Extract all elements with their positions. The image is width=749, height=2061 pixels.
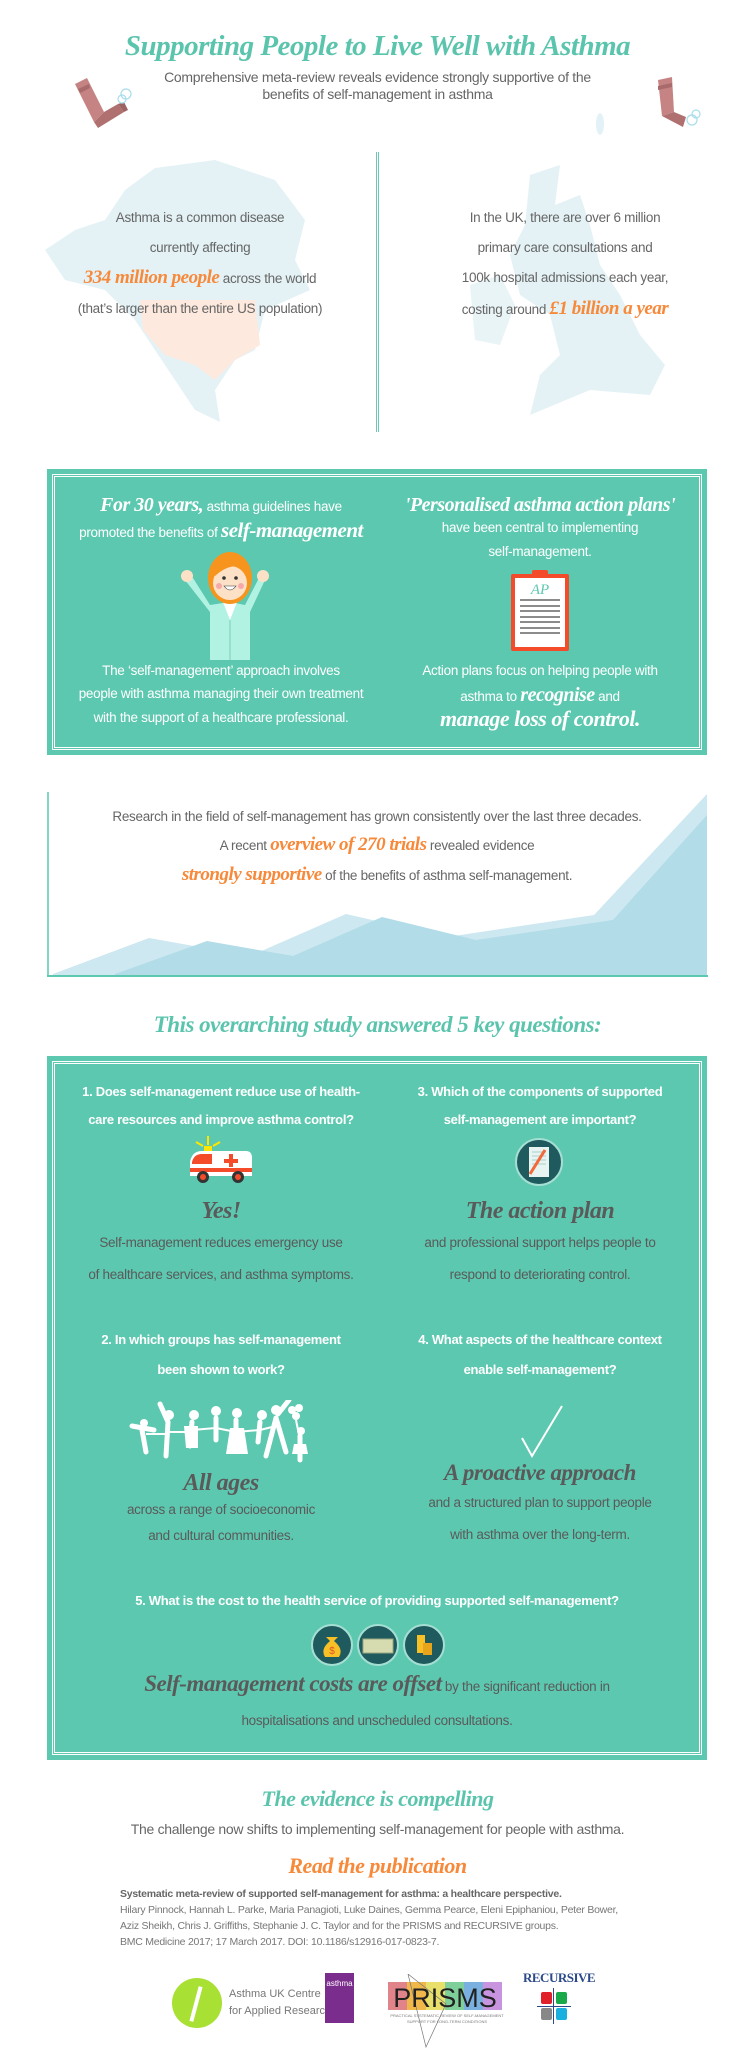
panel: research growth: A recent overview of 270 trials revealed evidence	[220, 834, 534, 855]
question 2: 2. In which groups has self-management	[101, 1332, 341, 1347]
subtitle	[164, 69, 591, 102]
icon: small drop	[596, 113, 604, 135]
text: left stat: currently affecting	[150, 240, 250, 255]
text: right stat	[462, 210, 669, 319]
text: right stat: 100k hospital admissions each year,	[462, 270, 668, 285]
text: for 30 years: For 30 years, asthma guidelines have	[100, 494, 342, 516]
panel: self-management: have been central to implementing	[442, 520, 638, 535]
text: reference: Aziz Sheikh, Chris J. Griffiths, Stephanie J. C. Taylor and for the PRISMS and RECURSIVE groups.	[120, 1920, 558, 1932]
chart: research growth	[47, 792, 708, 977]
panel: self-management: asthma to recognise and	[460, 684, 620, 706]
text: reference: Hilary Pinnock, Hannah L. Parke, Maria Panagioti, Luke Daines, Gemma Pearce, Eleni Epiphaniou, Peter Bower,	[120, 1904, 618, 1916]
question 3	[418, 1084, 662, 1282]
logo: asthma uk centre: for Applied Research	[229, 2005, 331, 2017]
text: reference: Systematic meta-review of supported self-management for asthma: a healthcare perspective.	[120, 1888, 562, 1900]
question 3: and professional support helps people to	[424, 1235, 656, 1250]
question 4: 4. What aspects of the healthcare context	[418, 1332, 662, 1347]
icon: action plan clipboard	[511, 570, 569, 651]
map: uk	[470, 165, 665, 415]
text: left stat: Asthma is a common disease	[116, 210, 284, 225]
question 3: The action plan	[466, 1198, 614, 1224]
question 3: 3. Which of the components of supported	[418, 1084, 662, 1099]
heading: evidence is compelling: The evidence is compelling	[262, 1786, 494, 1811]
question 5: Self-management costs are offset by the significant reduction in	[144, 1671, 610, 1696]
question 3: self-management are important?	[444, 1112, 636, 1127]
icon: money	[311, 1624, 445, 1666]
question 4	[418, 1332, 662, 1542]
text: left stat	[78, 210, 322, 316]
question 2: and cultural communities.	[148, 1528, 294, 1543]
question 1: 1. Does self-management reduce use of health-	[82, 1084, 360, 1099]
logo: prisms	[388, 1974, 504, 2048]
logo: asthma uk centre: Asthma UK Centre	[229, 1988, 321, 2000]
panel: key questions	[47, 1056, 707, 1760]
text: research: Research in the field of self-management has grown consistently over the last three decades.	[112, 809, 642, 824]
icon: checkmark	[521, 1406, 563, 1458]
title: Supporting People to Live Well with Asthma	[125, 30, 630, 62]
question 4: enable self-management?	[464, 1362, 616, 1377]
icon: action plan clipboard: AP	[530, 582, 549, 598]
heading: key questions: This overarching study answered 5 key questions:	[154, 1012, 601, 1037]
icon: inhaler left	[75, 78, 132, 128]
text: self-management approach: The ‘self-management’ approach involves	[102, 663, 340, 678]
question 4: with asthma over the long-term.	[450, 1527, 630, 1542]
text: left stat: 334 million people across the world	[84, 267, 316, 288]
question 2: across a range of socioeconomic	[127, 1502, 315, 1517]
subtitle: benefits of self-management in asthma	[262, 86, 493, 102]
subtitle: Comprehensive meta-review reveals evidence strongly supportive of the	[164, 69, 591, 85]
text: left stat: (that’s larger than the entire US population)	[78, 301, 322, 316]
icon: ambulance	[190, 1136, 252, 1183]
text: right stat: primary care consultations and	[478, 240, 652, 255]
logo: asthma uk centre	[172, 1973, 354, 2028]
divider	[376, 152, 379, 432]
text: personalised action plans: 'Personalised asthma action plans'	[405, 494, 675, 516]
icon: money: $	[329, 1646, 335, 1657]
panel: self-management: with the support of a healthcare professional.	[94, 710, 348, 725]
logo: prisms: PRACTICAL SYSTEMATIC REVIEW OF SELF-MANAGEMENT	[390, 2013, 504, 2018]
question 2	[101, 1332, 341, 1543]
panel: research growth: strongly supportive of the benefits of asthma self-management.	[182, 864, 572, 885]
question 1: Self-management reduces emergency use	[99, 1235, 343, 1250]
logo: recursive: RECURSIVE	[523, 1970, 595, 1985]
icon: inhaler right	[658, 77, 700, 127]
question 5: hospitalisations and unscheduled consultations.	[241, 1713, 513, 1728]
heading: read the publication: Read the publication	[288, 1853, 467, 1878]
text: reference	[120, 1888, 618, 1948]
text: action plans focus: Action plans focus on helping people with	[422, 663, 658, 678]
icon: group of people	[130, 1400, 308, 1462]
question 4: and a structured plan to support people	[428, 1495, 652, 1510]
panel: self-management: people with asthma managing their own treatment	[79, 686, 363, 701]
text: right stat: In the UK, there are over 6 million	[470, 210, 660, 225]
question 1	[82, 1084, 360, 1282]
map: north america	[45, 160, 310, 422]
panel: self-management: self-management.	[488, 544, 592, 559]
logo: asthma uk centre: asthma	[326, 1979, 353, 1988]
question 4: A proactive approach	[444, 1460, 636, 1485]
logo: prisms: PRISMS	[393, 1983, 497, 2013]
panel: self-management	[47, 469, 707, 755]
question 1: care resources and improve asthma control?	[88, 1112, 354, 1127]
icon: healthcare professional	[181, 552, 269, 660]
question 2: been shown to work?	[157, 1362, 285, 1377]
question 5: 5. What is the cost to the health service of providing supported self-management?	[135, 1593, 619, 1608]
icon: action plan document	[515, 1138, 563, 1186]
question 2: All ages	[183, 1470, 259, 1496]
panel: self-management: promoted the benefits of self-management	[79, 518, 363, 542]
text: reference: BMC Medicine 2017; 17 March 2017. DOI: 10.1186/s12916-017-0823-7.	[120, 1936, 439, 1948]
logo: prisms: SUPPORT FOR LONG-TERM CONDITIONS	[407, 2019, 487, 2024]
question 1: Yes!	[201, 1198, 241, 1224]
panel: research growth	[47, 792, 708, 977]
panel: self-management: manage loss of control.	[440, 706, 640, 731]
question 5	[135, 1593, 619, 1728]
text: challenge: The challenge now shifts to implementing self-management for people with asthma.	[131, 1821, 624, 1837]
text: right stat: costing around £1 billion a year	[462, 298, 668, 319]
question 3: respond to deteriorating control.	[450, 1267, 630, 1282]
question 1: of healthcare services, and asthma symptoms.	[88, 1267, 354, 1282]
logo: recursive	[523, 1970, 595, 2024]
